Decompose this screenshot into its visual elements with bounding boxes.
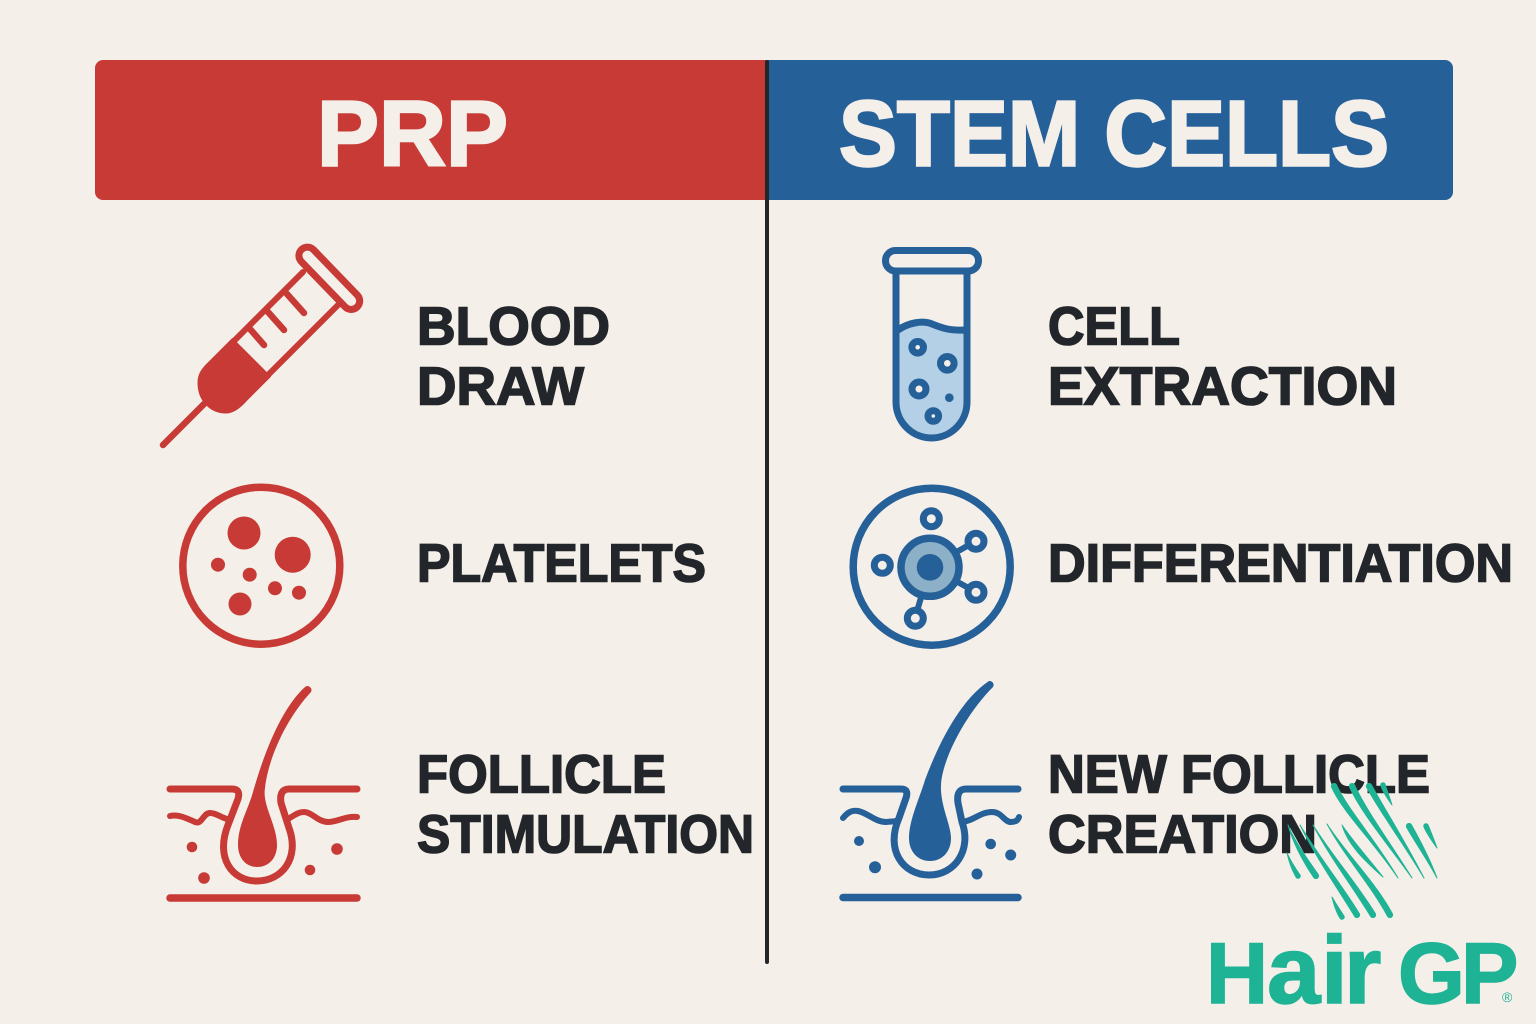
logo wordmark: GP (1398, 926, 1518, 1022)
logo wordmark: air (1267, 917, 1381, 1024)
label: cell extraction: EXTRACTION (1048, 356, 1397, 416)
panel: Stem Cells header (767, 60, 1453, 200)
logo mark: hair strands (1287, 783, 1437, 919)
label: blood draw: BLOOD (417, 296, 610, 356)
panel: PRP column (163, 244, 754, 898)
label: blood draw: DRAW (417, 356, 584, 416)
center divider (765, 60, 769, 964)
heading: PRP: PRP (317, 82, 508, 186)
logo wordmark: H (1206, 926, 1268, 1022)
icon: platelets (183, 487, 340, 644)
icon: syringe (163, 244, 363, 445)
icon: differentiating stem cell (853, 488, 1010, 645)
label: follicle stimulation: FOLLICLE (417, 744, 666, 804)
label: platelets: PLATELETS (417, 534, 706, 594)
label: differentiation: DIFFERENTIATION (1048, 534, 1513, 594)
icon: test tube (886, 250, 978, 438)
panel: PRP header (95, 60, 767, 200)
label: follicle stimulation: STIMULATION (417, 804, 754, 864)
label: new follicle creation: NEW FOLLICLE (1048, 744, 1430, 804)
label: follicle stimulation (417, 744, 754, 864)
registered mark: ® (1502, 989, 1513, 1005)
label: cell extraction (1048, 296, 1397, 416)
icon: new follicle (843, 681, 1019, 898)
heading: STEM CELLS: STEM CELLS (839, 82, 1389, 186)
label: new follicle creation: CREATION (1048, 804, 1317, 864)
panel: Stem Cells column (843, 250, 1513, 898)
label: new follicle creation (1048, 744, 1430, 864)
label: blood draw (417, 296, 610, 416)
icon: follicle stimulation (170, 686, 357, 898)
logo: Hair GP (1206, 783, 1518, 1024)
label: cell extraction: CELL (1048, 296, 1180, 356)
